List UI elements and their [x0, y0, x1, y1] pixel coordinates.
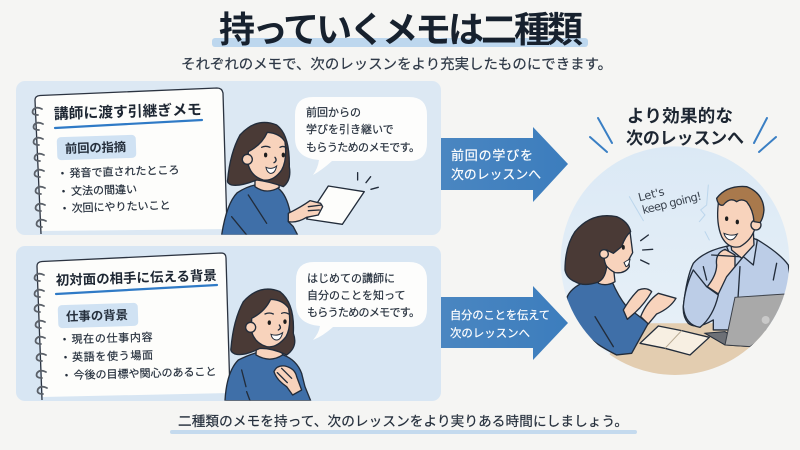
title: 持っていくメモは二種類	[219, 9, 583, 50]
notebook: handover memo	[33, 88, 228, 234]
speech bubble: handover	[295, 97, 427, 175]
handwritten speech: keep going!	[641, 189, 703, 217]
tag: work background: 仕事の背景	[66, 307, 128, 324]
list: work items: 今後の目標や関心のあること	[73, 364, 217, 382]
panel: handover memo	[16, 81, 441, 235]
list: feedback items: 文法の間違い	[71, 182, 137, 198]
icon: emphasis rays	[590, 118, 776, 152]
man	[683, 186, 793, 330]
handwritten speech: Let's	[637, 184, 666, 204]
notebook heading: 講師に渡す引継ぎメモ	[54, 100, 202, 123]
panel: background memo	[16, 246, 441, 401]
speech bubble: background: はじめての講師に	[307, 271, 395, 285]
list: feedback items: 発音で直されたところ	[69, 163, 180, 180]
speech bubble: handover: 前回からの	[306, 105, 361, 119]
circle illustration: lesson conversation	[561, 146, 800, 383]
notebook heading: 初対面の相手に伝える背景	[56, 267, 217, 288]
list: feedback items	[61, 163, 181, 215]
arrow: previous learning	[441, 127, 568, 202]
tag: previous feedback: 前回の指摘	[65, 139, 126, 156]
woman talking	[565, 216, 676, 355]
table	[610, 323, 770, 375]
arrow: previous learning: 次のレッスンへ	[451, 167, 541, 182]
speech bubble: background: もらうためのメモです。	[307, 306, 420, 319]
tag: previous feedback	[57, 135, 136, 160]
list: feedback items: 次回にやりたいこと	[71, 199, 171, 215]
list: work items: 英語を使う場面	[72, 348, 153, 364]
laptop	[705, 294, 785, 347]
notebook: background memo	[35, 253, 230, 400]
arrow: telling about yourself	[441, 286, 568, 360]
speech bubble: handover: もらうためのメモです。	[306, 141, 420, 154]
list: work items	[63, 328, 217, 382]
heading: more effective lesson	[626, 106, 744, 148]
closing message: 二種類のメモを持って、次のレッスンをより実りある時間にしましょう。	[178, 414, 628, 429]
handwritten speech	[629, 184, 709, 240]
woman with hand on chest	[225, 289, 311, 401]
speech bubble: background	[296, 262, 427, 340]
arrow: telling about yourself: 自分のことを伝えて	[450, 309, 550, 322]
heading: more effective lesson: より効果的な	[627, 106, 733, 126]
speech bubble: background: 自分のことを知って	[307, 288, 405, 302]
open notebook	[640, 326, 709, 355]
woman holding a memo	[222, 122, 378, 235]
arrow: previous learning: 前回の学びを	[451, 148, 533, 163]
arrow: telling about yourself: 次のレッスンへ	[450, 327, 530, 340]
subtitle: それぞれのメモで、次のレッスンをより充実したものにできます。	[181, 56, 612, 73]
speech bubble: handover: 学びを引き継いで	[306, 122, 394, 136]
list: work items: 現在の仕事内容	[71, 330, 153, 346]
tag: work background	[58, 303, 138, 328]
heading: more effective lesson: 次のレッスンへ	[626, 129, 744, 148]
